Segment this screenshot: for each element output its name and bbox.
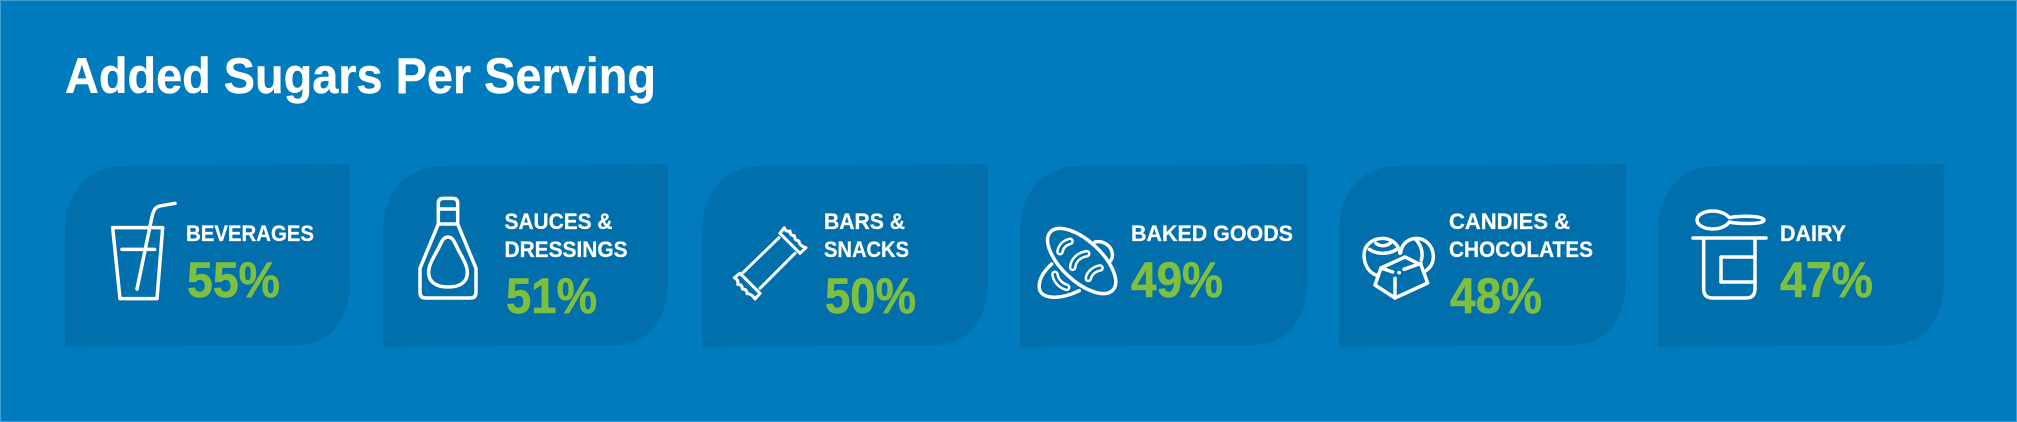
- value: 51%: 51%: [506, 268, 597, 324]
- icon: snack bar: [734, 228, 806, 299]
- icon: chocolates: [1364, 238, 1433, 298]
- label: bars and snacks: BARS &: [824, 209, 905, 234]
- panel background: [702, 164, 988, 347]
- label: sauces and dressings: SAUCES &: [504, 209, 613, 234]
- label: candies and chocolates: CANDIES &: [1449, 209, 1570, 234]
- icon: bottle: [420, 198, 476, 298]
- value: 55%: 55%: [187, 252, 280, 308]
- label: dairy: DAIRY: [1780, 221, 1846, 246]
- value: 47%: 47%: [1780, 252, 1873, 308]
- panel background: [1020, 164, 1307, 347]
- panel background: [65, 164, 350, 347]
- panel background: [1339, 164, 1626, 347]
- panel: baked goods: [1020, 164, 1307, 347]
- label: beverages: BEVERAGES: [186, 221, 314, 246]
- icon: cup with straw: [113, 203, 175, 299]
- panel: candies and chocolates: [1339, 164, 1626, 347]
- label: bars and snacks: [824, 209, 909, 262]
- panel background: [383, 164, 668, 347]
- icon: yogurt cup with spoon: [1693, 211, 1766, 298]
- value: 49%: 49%: [1131, 252, 1223, 308]
- panel: sauces and dressings: [383, 164, 668, 347]
- label: baked goods: BAKED GOODS: [1131, 221, 1293, 246]
- label: candies and chocolates: [1449, 209, 1593, 262]
- value: 48%: 48%: [1450, 268, 1542, 324]
- panel background: [1658, 164, 1944, 347]
- label: bars and snacks: SNACKS: [824, 237, 909, 262]
- icon: bread loaves: [1037, 217, 1127, 305]
- value: 50%: 50%: [825, 268, 916, 324]
- panel: beverages: [65, 164, 350, 347]
- label: candies and chocolates: CHOCOLATES: [1449, 237, 1593, 262]
- label: sauces and dressings: DRESSINGS: [504, 237, 628, 262]
- panel: dairy: [1658, 164, 1944, 347]
- label: sauces and dressings: [504, 209, 628, 262]
- panel: bars and snacks: [702, 164, 988, 347]
- title: Added Sugars Per Serving: [65, 48, 656, 104]
